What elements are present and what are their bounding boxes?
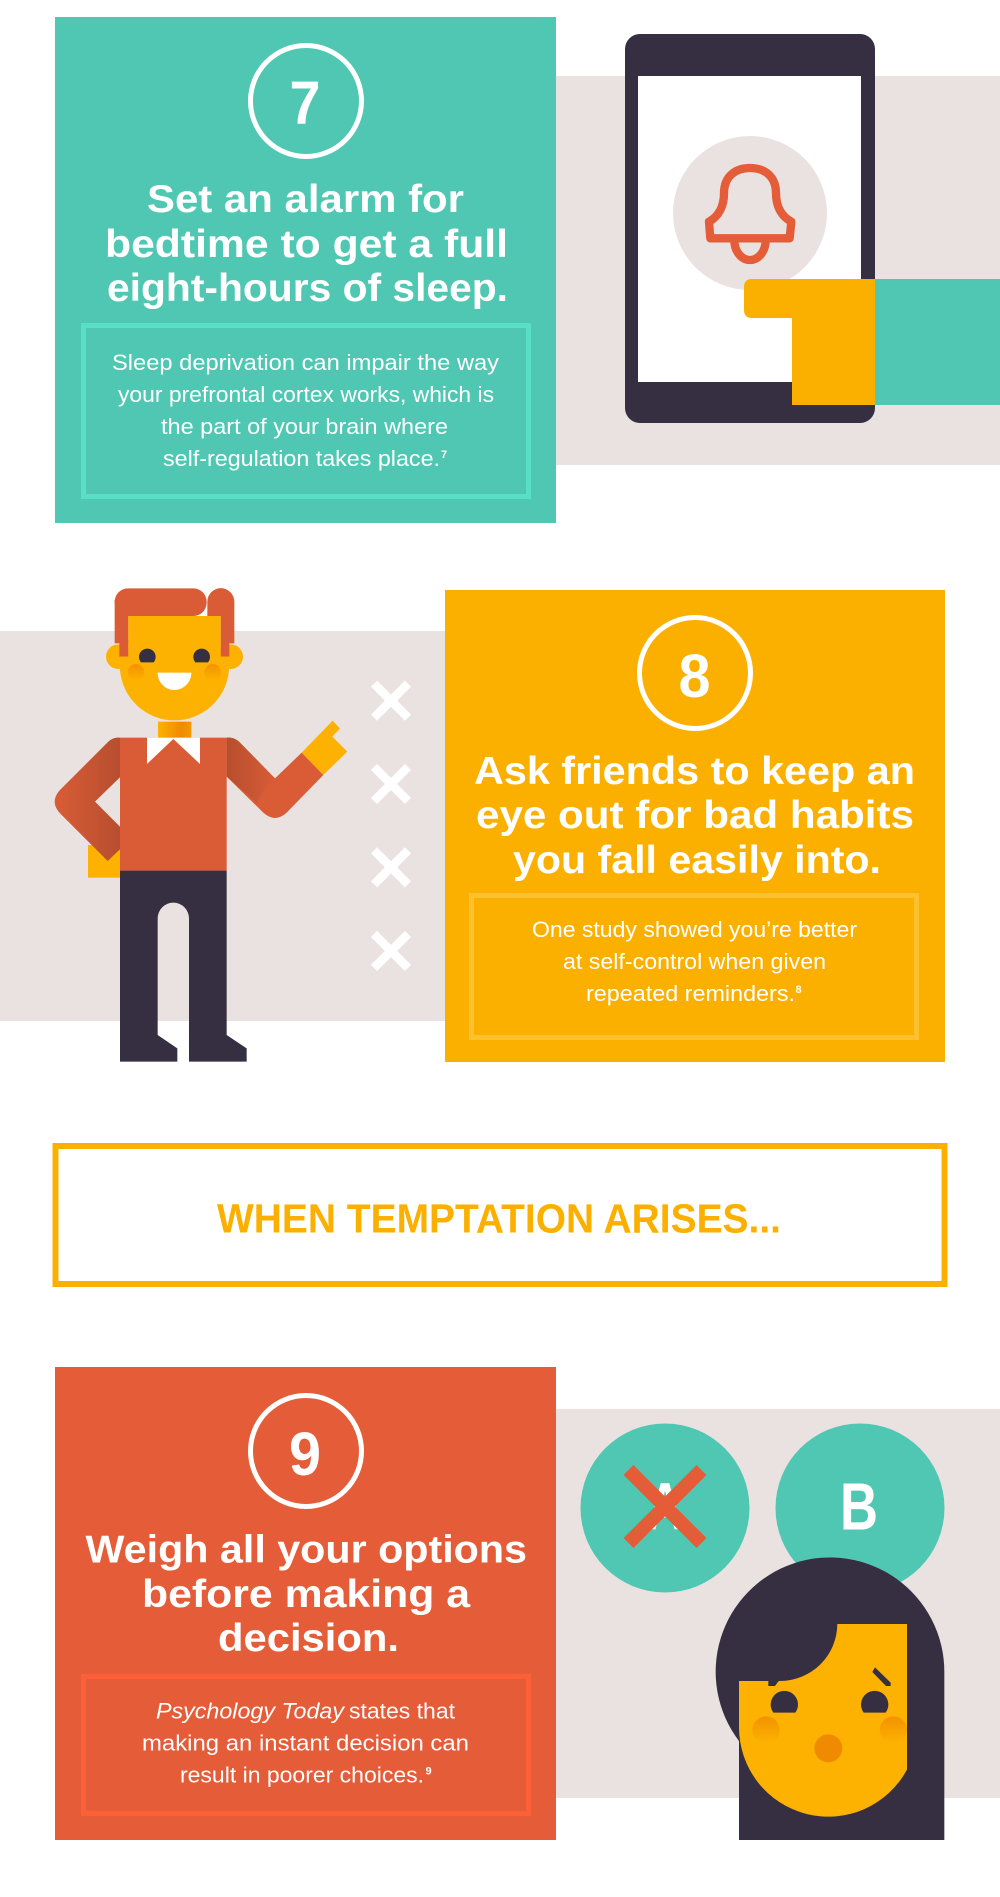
callout: sleep deprivation [84, 326, 528, 496]
hair [115, 588, 234, 657]
background band: tip 7 [556, 76, 1000, 465]
callout: sleep deprivation: Sleep deprivation can impair the way [112, 350, 499, 375]
number badge 7 [250, 46, 362, 156]
section banner: WHEN TEMPTATION ARISES... [217, 1196, 781, 1242]
callout: sleep deprivation: self-regulation takes place. [163, 446, 440, 471]
cross marks [374, 684, 408, 968]
heading: tip 7: bedtime to get a full [105, 223, 508, 266]
collar [147, 738, 200, 764]
callout: sleep deprivation: your prefrontal cortex works, which is [118, 382, 494, 407]
panel: tip 8 [445, 590, 945, 1062]
illustration: phone with bell alarm [625, 34, 1000, 423]
icon: bell [709, 168, 791, 260]
callout: Psychology Today: result in poorer choices. [180, 1762, 424, 1788]
callout: Psychology Today [84, 1676, 528, 1814]
option A circle crossed out [580, 1424, 750, 1592]
smile [158, 673, 191, 690]
heading: tip 7: eight-hours of sleep. [107, 267, 508, 310]
callout: study on reminders: at self-control when given [563, 949, 826, 974]
panel: tip 9 [55, 1367, 556, 1840]
option B circle: B [840, 1470, 878, 1544]
callout: Psychology Today: Psychology Today [156, 1698, 346, 1724]
face [739, 1624, 907, 1817]
cheeks [128, 664, 221, 681]
eyebrows [768, 1667, 891, 1686]
background band: tip 9 [556, 1409, 1000, 1798]
callout: study on reminders: 8 [796, 984, 802, 996]
heading: tip 7: Set an alarm for [147, 178, 464, 221]
heading: tip 9: before making a [142, 1573, 470, 1616]
heading: tip 9 [86, 1528, 527, 1660]
right arm [227, 738, 323, 818]
heading: tip 7 [105, 178, 508, 310]
hand and sleeve [744, 279, 1000, 405]
section banner [56, 1146, 944, 1284]
heading: tip 8: Ask friends to keep an [474, 750, 915, 793]
background band: tip 8 [0, 631, 445, 1021]
left hand [88, 845, 121, 878]
trousers [120, 871, 247, 1062]
number badge 8: 8 [678, 642, 710, 710]
eyes [771, 1691, 888, 1713]
callout: Psychology Today: 9 [426, 1766, 432, 1778]
callout: study on reminders [472, 896, 916, 1038]
left arm [55, 738, 121, 861]
illustration: man pointing [55, 588, 347, 1062]
number badge 9 [250, 1396, 362, 1506]
illustration: worried woman [716, 1557, 944, 1840]
number badge 7: 7 [290, 69, 320, 137]
callout: study on reminders: One study showed you’re better [532, 917, 857, 942]
heading: tip 9: Weigh all your options [86, 1528, 527, 1572]
option A circle crossed out: A [647, 1470, 683, 1544]
callout: study on reminders: repeated reminders. [586, 981, 795, 1006]
hair [716, 1557, 944, 1840]
callout: Psychology Today: making an instant decision can [142, 1730, 469, 1756]
heading: tip 8: you fall easily into. [513, 839, 881, 882]
pointing hand [302, 721, 347, 775]
heading: tip 8: eye out for bad habits [476, 794, 914, 837]
shirt [120, 738, 227, 871]
ears [106, 644, 243, 669]
option B circle [776, 1424, 944, 1592]
number badge 8 [640, 618, 750, 728]
callout: Psychology Today: states that [349, 1698, 455, 1724]
number badge 9: 9 [289, 1420, 321, 1488]
heading: tip 8 [474, 750, 915, 882]
callout: sleep deprivation: the part of your brain where [161, 414, 448, 439]
panel: tip 7 [55, 17, 556, 523]
eyes [139, 649, 210, 662]
heading: tip 9: decision. [218, 1617, 399, 1660]
callout: sleep deprivation: 7 [441, 449, 447, 461]
neck [158, 722, 191, 738]
face [120, 616, 229, 720]
mouth [814, 1734, 842, 1762]
cheeks [752, 1716, 907, 1744]
